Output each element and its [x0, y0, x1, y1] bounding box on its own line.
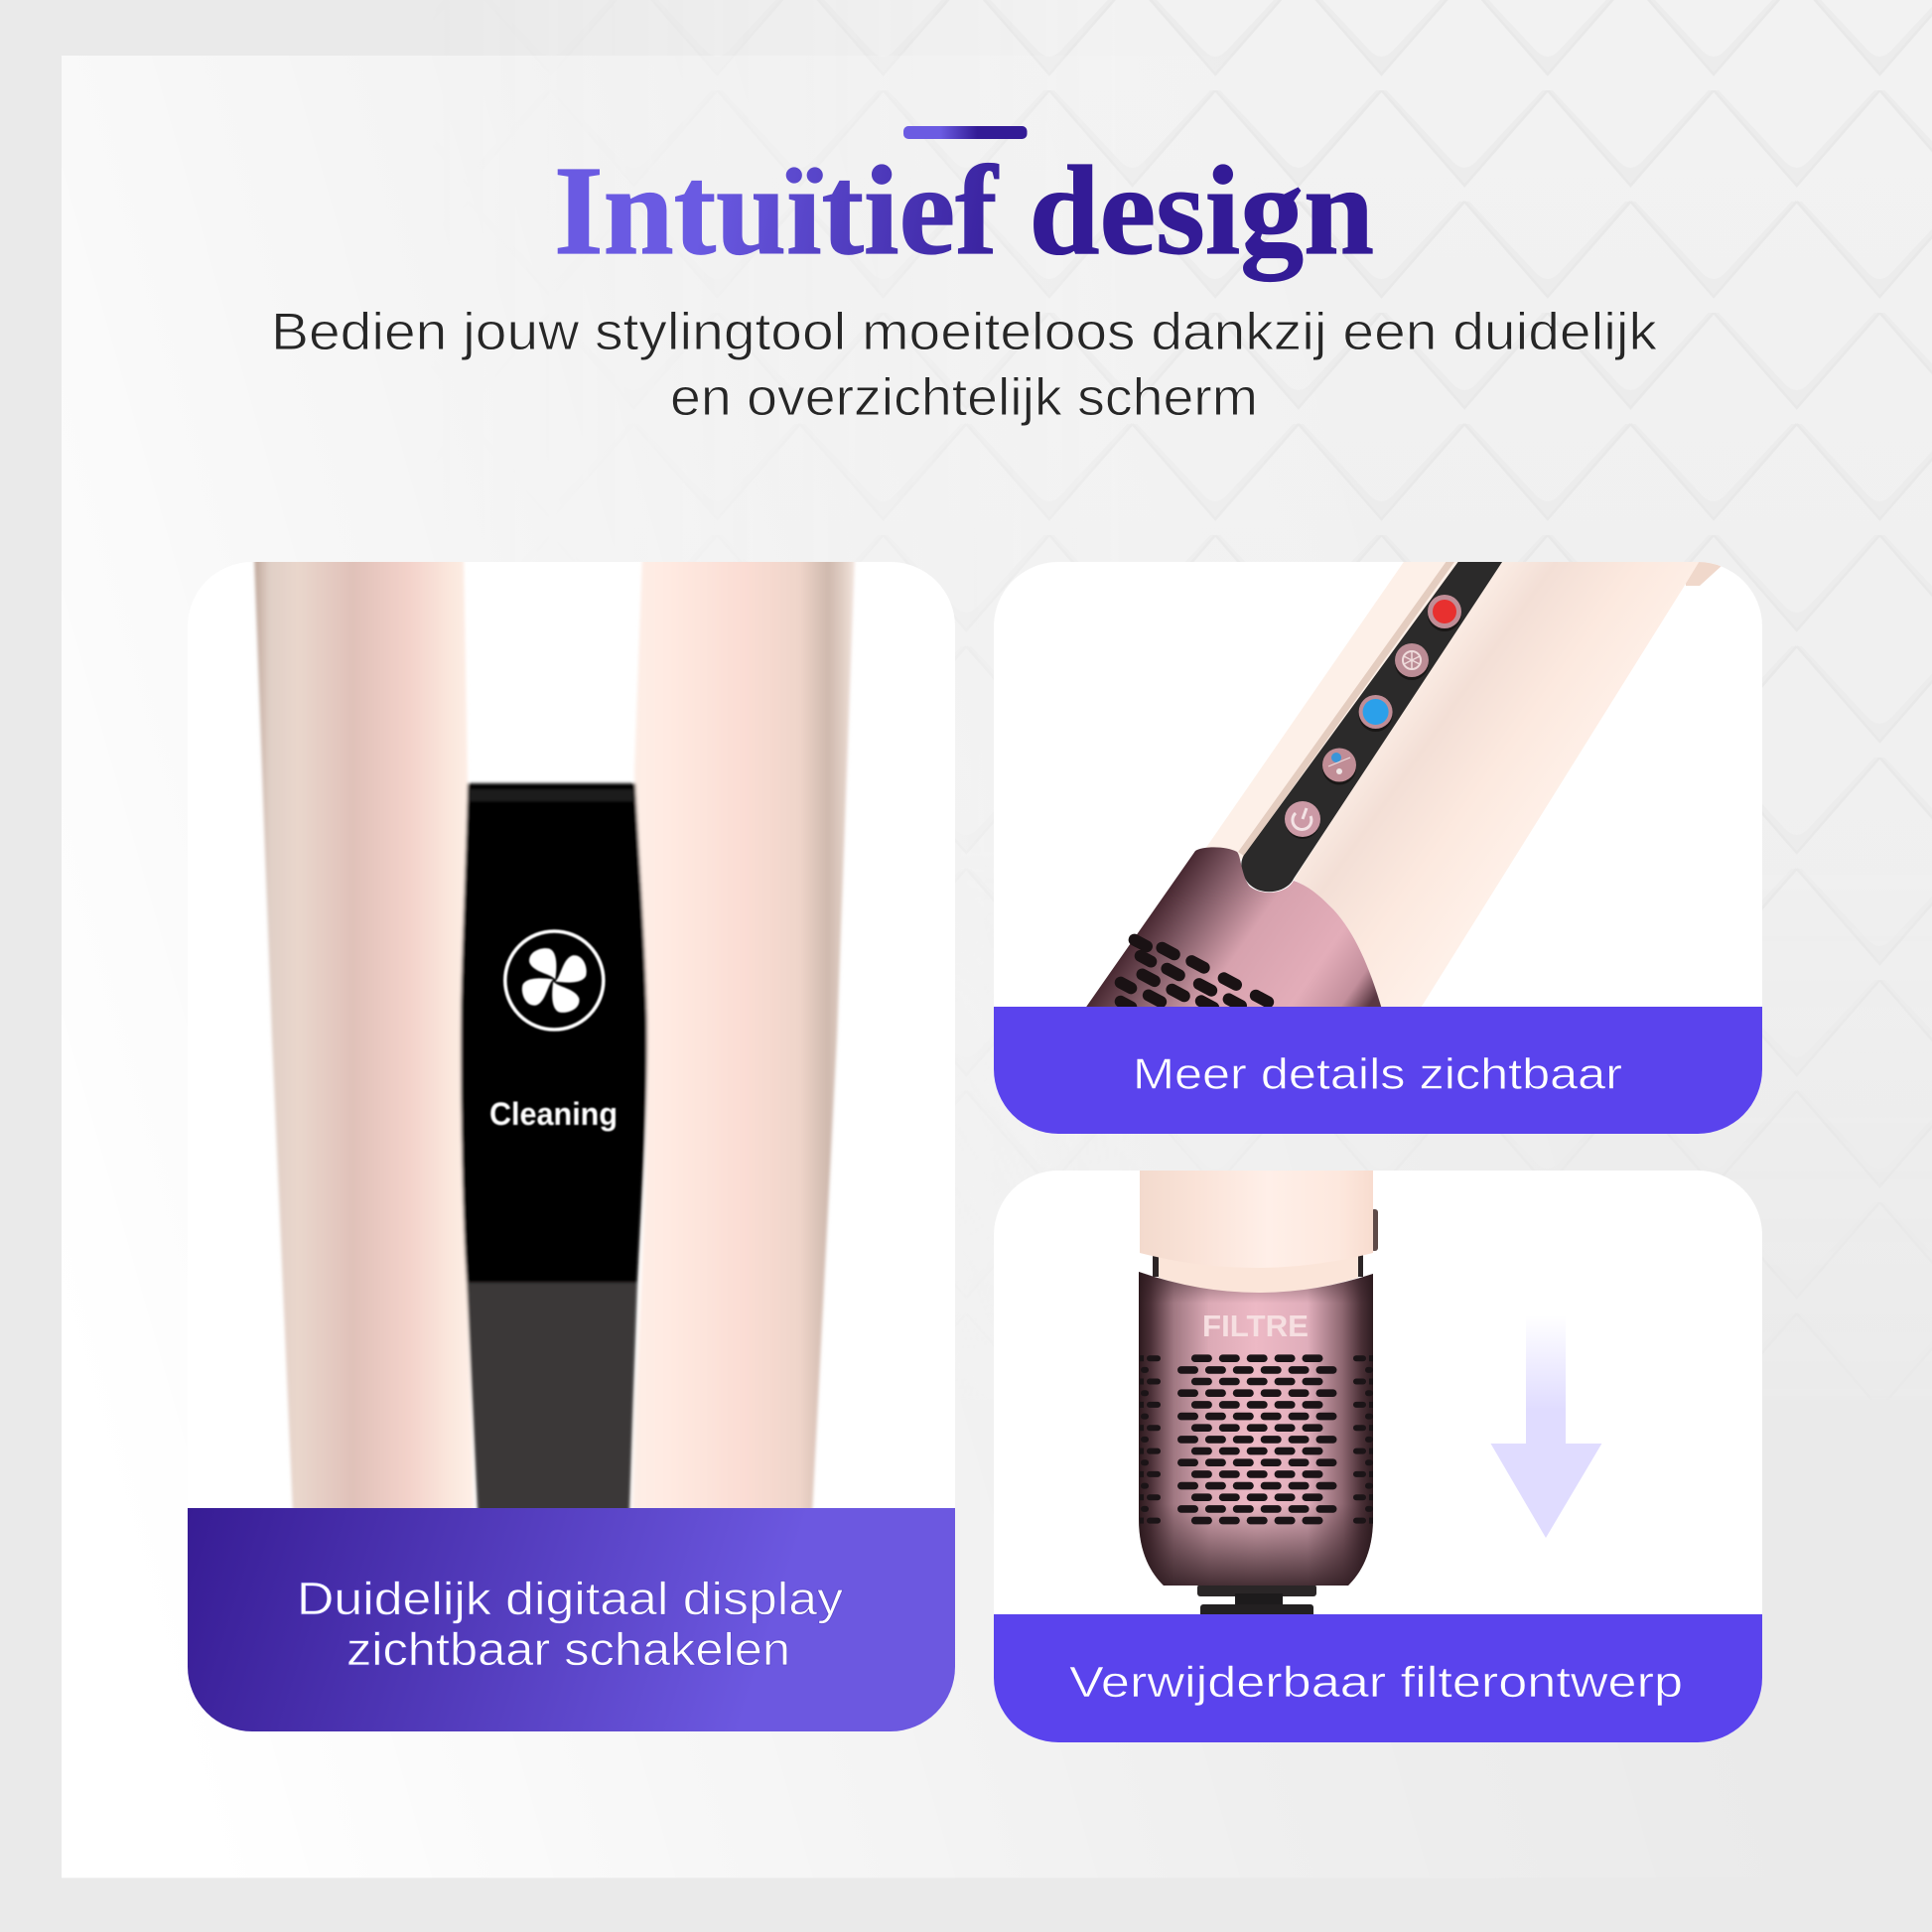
- display label: Cleaning: [489, 1096, 618, 1132]
- subtitle: Bedien jouw stylingtool moeiteloos dankzij een duidelijk: [271, 303, 1658, 361]
- arrow: downward: [1491, 1315, 1601, 1538]
- button: drop: [1322, 749, 1356, 784]
- caption band: [188, 1508, 955, 1731]
- panel: removable filter: [994, 1165, 1762, 1742]
- caption text: zichtbaar schakelen: [346, 1623, 790, 1675]
- top right fragment: [1686, 562, 1722, 586]
- side button: [1373, 1209, 1378, 1251]
- panel: control buttons: [994, 556, 1762, 1134]
- subtitle: [271, 303, 1658, 427]
- button: blue: [1359, 695, 1393, 732]
- panel: digital display: [188, 556, 955, 1731]
- background tile pattern: [1110, 1, 1382, 83]
- rose vent section: [1082, 847, 1383, 1013]
- pale collar: [1159, 1253, 1358, 1293]
- filter body: [1139, 1272, 1373, 1586]
- title: Intuïtief design: [554, 140, 1374, 281]
- product photo: straightener with display: [254, 556, 855, 1514]
- button: power: [1285, 801, 1320, 839]
- caption text: Verwijderbaar filterontwerp: [1069, 1658, 1683, 1707]
- FILTRE label: FILTRE: [1202, 1309, 1309, 1343]
- product photo: handle with buttons: [1082, 556, 1732, 1016]
- product photo: filter: [1139, 1165, 1601, 1618]
- dark collar edges: [1153, 1253, 1363, 1277]
- caption band: [994, 1007, 1762, 1134]
- filter slots: [1140, 1354, 1373, 1524]
- caption text: Duidelijk digitaal display: [297, 1573, 843, 1624]
- button: red: [1428, 595, 1461, 631]
- black button strip: [1241, 556, 1506, 892]
- caption text: [297, 1573, 843, 1675]
- barrel: [1294, 556, 1703, 1013]
- vent slots: [1114, 933, 1275, 1007]
- button: fan: [1395, 643, 1429, 680]
- neck and cable mount: [1197, 1586, 1316, 1614]
- pale left strip: [1205, 556, 1464, 860]
- icon: fan: [489, 931, 618, 1132]
- caption band: [994, 1614, 1762, 1742]
- accent bar above title: [903, 126, 1027, 139]
- subtitle: en overzichtelijk scherm: [670, 368, 1258, 427]
- caption text: Meer details zichtbaar: [1133, 1050, 1622, 1098]
- barrel: [1140, 1165, 1373, 1268]
